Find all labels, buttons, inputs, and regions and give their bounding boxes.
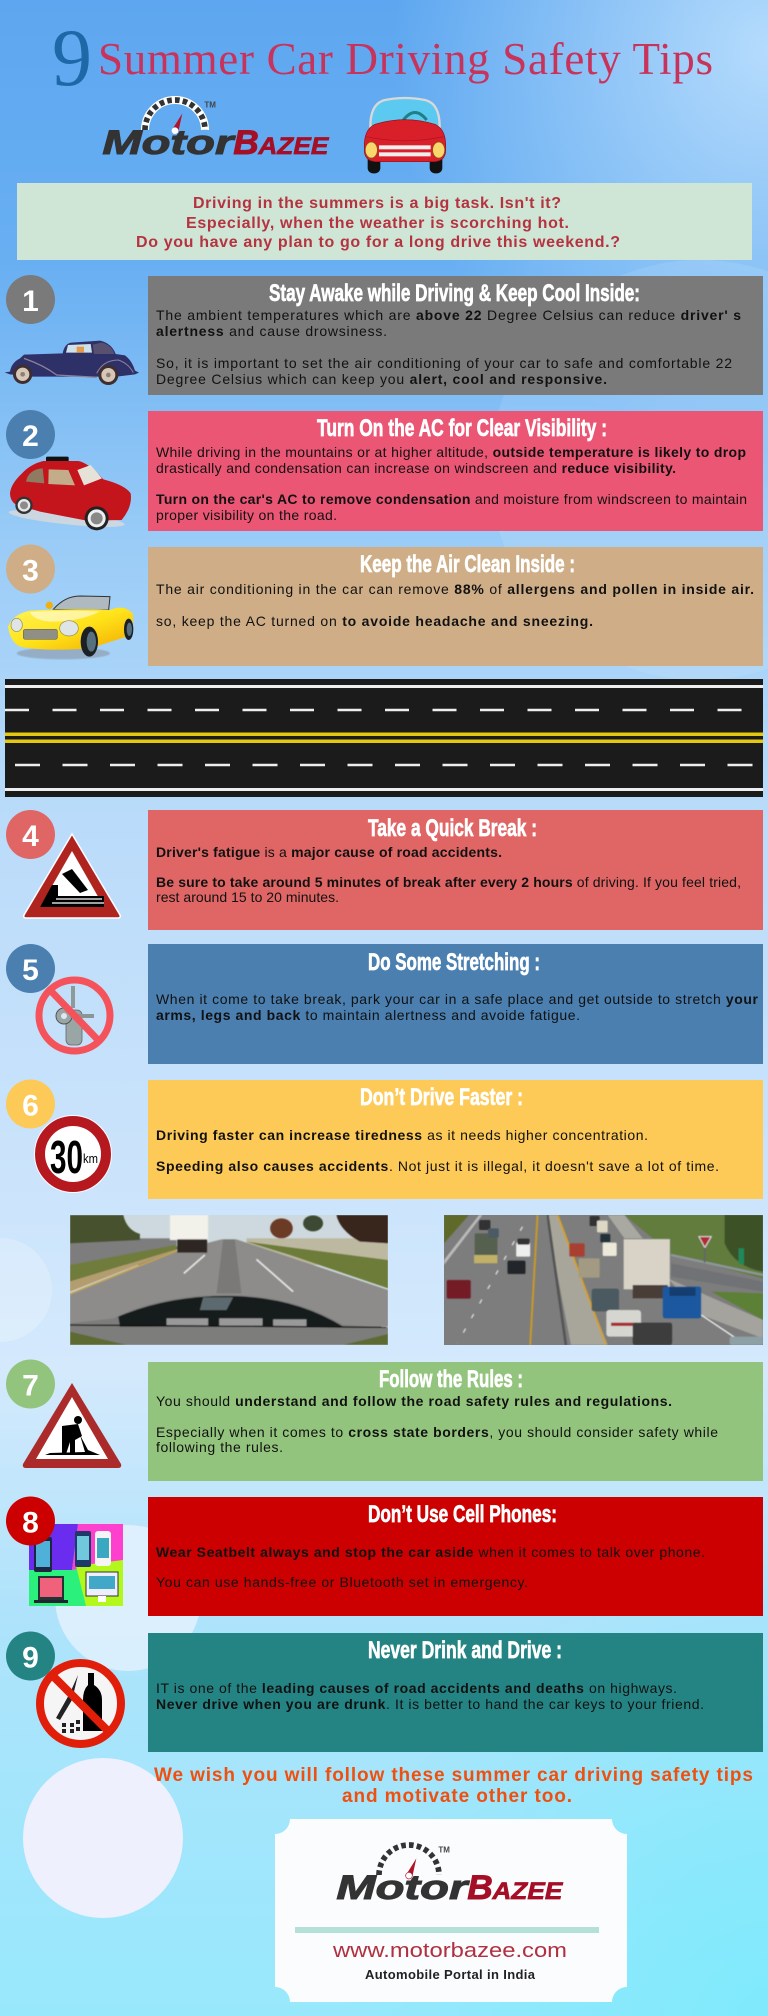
icon: red cartoon car	[364, 98, 446, 173]
closing message: and motivate other too.	[342, 1786, 572, 1807]
website address: www.motorbazee.com	[332, 1940, 567, 1962]
number badge 6	[6, 1080, 55, 1128]
body text: When it come to take break, park your car in a safe place and get outside to stretch your	[156, 991, 759, 1007]
body text	[156, 1680, 704, 1712]
panel: tip 1	[148, 276, 763, 395]
body text	[156, 581, 754, 629]
number badge 8: 8	[22, 1506, 39, 1540]
footer logo	[336, 1845, 563, 1907]
title	[52, 12, 713, 103]
body text: Especially when it comes to cross state borders, you should consider safety while	[156, 1424, 718, 1440]
body text: Turn on the car's AC to remove condensation and moisture from windscreen to maintain	[156, 491, 747, 507]
footer logo: TM	[438, 1845, 450, 1854]
icon: road works warning sign	[23, 1383, 121, 1468]
tagline: Automobile Portal in India	[365, 1967, 536, 1982]
icon: 30 km speed limit sign: 30	[50, 1131, 83, 1183]
logo: MotorBazee: B	[233, 124, 259, 162]
icon: blue vintage car	[5, 341, 139, 385]
heading: Never Drink and Drive :	[368, 1637, 562, 1664]
heading: Follow the Rules :	[379, 1366, 523, 1393]
heading: Don’t Drive Faster :	[360, 1084, 523, 1111]
body text	[156, 1393, 718, 1455]
photo: view over car hood on a road	[70, 1215, 388, 1345]
body text: Speeding also causes accidents. Not just it is illegal, it doesn't save a lot of time.	[156, 1158, 719, 1174]
number badge 3	[6, 544, 55, 594]
body text	[156, 844, 741, 905]
big number nine: 9	[52, 12, 92, 103]
body text: You should understand and follow the road safety rules and regulations.	[156, 1393, 672, 1409]
icon: 30 km speed limit sign: km	[83, 1151, 98, 1166]
photo: highway traffic	[444, 1215, 763, 1345]
body text: Driver's fatigue is a major cause of road accidents.	[156, 844, 502, 860]
heading: Keep the Air Clean Inside :	[360, 551, 575, 578]
closing message	[154, 1765, 753, 1807]
icon: 30 km speed limit sign	[34, 1116, 112, 1192]
body text: proper visibility on the road.	[156, 507, 337, 523]
body text: IT is one of the leading causes of road accidents and deaths on highways.	[156, 1680, 677, 1696]
panel: introduction: Especially, when the weather is scorching hot.	[186, 215, 569, 232]
body text: so, keep the AC turned on to avoide headache and sneezing.	[156, 613, 593, 629]
icon: no drink and drugs sign	[40, 1663, 121, 1744]
footer logo: AZEE	[491, 1878, 563, 1905]
body text: The ambient temperatures which are above 22 Degree Celsius can reduce driver' s	[156, 307, 741, 323]
number badge 3: 3	[22, 554, 39, 588]
footer logo: Motor	[336, 1869, 470, 1907]
heading: Do Some Stretching :	[368, 949, 540, 976]
number badge 4: 4	[22, 820, 39, 853]
body text: rest around 15 to 20 minutes.	[156, 889, 339, 905]
title text: Summer Car Driving Safety Tips	[98, 34, 713, 84]
closing message: We wish you will follow these summer car driving safety tips	[154, 1765, 753, 1786]
heading: Don’t Use Cell Phones:	[368, 1501, 557, 1528]
icon: yellow convertible	[8, 596, 133, 659]
number badge 1: 1	[22, 285, 39, 318]
footer logo: B	[467, 1869, 493, 1907]
number badge 9: 9	[22, 1642, 39, 1674]
body text: So, it is important to set the air conditioning of your car to safe and comfortable 22	[156, 355, 732, 371]
number badge 4	[6, 810, 55, 859]
body text: following the rules.	[156, 1439, 283, 1455]
panel: tip 9	[148, 1633, 763, 1752]
number badge 7	[6, 1360, 55, 1408]
body text: Never drive when you are drunk. It is better to hand the car keys to your friend.	[156, 1696, 704, 1712]
body text: Be sure to take around 5 minutes of break after every 2 hours of driving. If you feel tried,	[156, 874, 741, 890]
body text	[156, 1544, 705, 1590]
number badge 7: 7	[22, 1370, 39, 1402]
number badge 2	[6, 410, 55, 459]
body text	[156, 307, 741, 387]
panel: tip 7	[148, 1362, 763, 1481]
panel: tip 2	[148, 411, 763, 531]
body text: arms, legs and back to maintain alertness and avoide fatigue.	[156, 1007, 580, 1023]
number badge 5: 5	[22, 954, 39, 987]
number badge 1	[6, 275, 55, 324]
panel: tip 3	[148, 547, 763, 666]
panel: tip 6	[148, 1080, 763, 1199]
body text	[156, 991, 759, 1023]
number badge 5	[6, 944, 55, 993]
footer card	[275, 1819, 627, 2002]
body text: The air conditioning in the car can remove 88% of allergens and pollen in inside air.	[156, 581, 754, 597]
body text: You can use hands-free or Bluetooth set in emergency.	[156, 1574, 528, 1590]
logo: MotorBazee: TM	[204, 100, 216, 109]
body text: Degree Celsius which can keep you alert, cool and responsive.	[156, 371, 607, 387]
panel: introduction: Driving in the summers is a big task. Isn't it?	[193, 195, 561, 212]
number badge 6: 6	[22, 1090, 39, 1122]
body text: While driving in the mountains or at higher altitude, outside temperature is likely to drop	[156, 444, 746, 460]
icon: quayside warning sign	[24, 834, 120, 918]
icon: no car keys sign	[39, 980, 110, 1051]
number badge 9	[6, 1632, 55, 1680]
body text: Wear Seatbelt always and stop the car aside when it comes to talk over phone.	[156, 1544, 705, 1560]
body text	[156, 1127, 719, 1174]
body text: drastically and condensation can increase on windscreen and reduce visibility.	[156, 460, 676, 476]
number badge 8	[6, 1496, 55, 1546]
body text: alertness and cause drowsiness.	[156, 323, 387, 339]
logo: MotorBazee: Motor	[102, 124, 236, 162]
heading: Turn On the AC for Clear Visibility :	[317, 415, 607, 442]
icon: red small car	[8, 457, 131, 530]
heading: Take a Quick Break :	[368, 815, 537, 842]
panel: tip 8	[148, 1497, 763, 1616]
logo: MotorBazee	[102, 100, 329, 162]
body text: Driving faster can increase tiredness as it needs higher concentration.	[156, 1127, 648, 1143]
panel: tip 5	[148, 944, 763, 1064]
logo: MotorBazee: AZEE	[257, 133, 329, 160]
road illustration	[5, 679, 763, 797]
panel: tip 4	[148, 810, 763, 930]
icon: devices collage	[29, 1524, 123, 1606]
body text	[156, 444, 747, 523]
panel: introduction: Do you have any plan to go for a long drive this weekend.?	[136, 234, 620, 251]
number badge 2: 2	[22, 420, 39, 453]
panel: introduction	[17, 183, 752, 260]
